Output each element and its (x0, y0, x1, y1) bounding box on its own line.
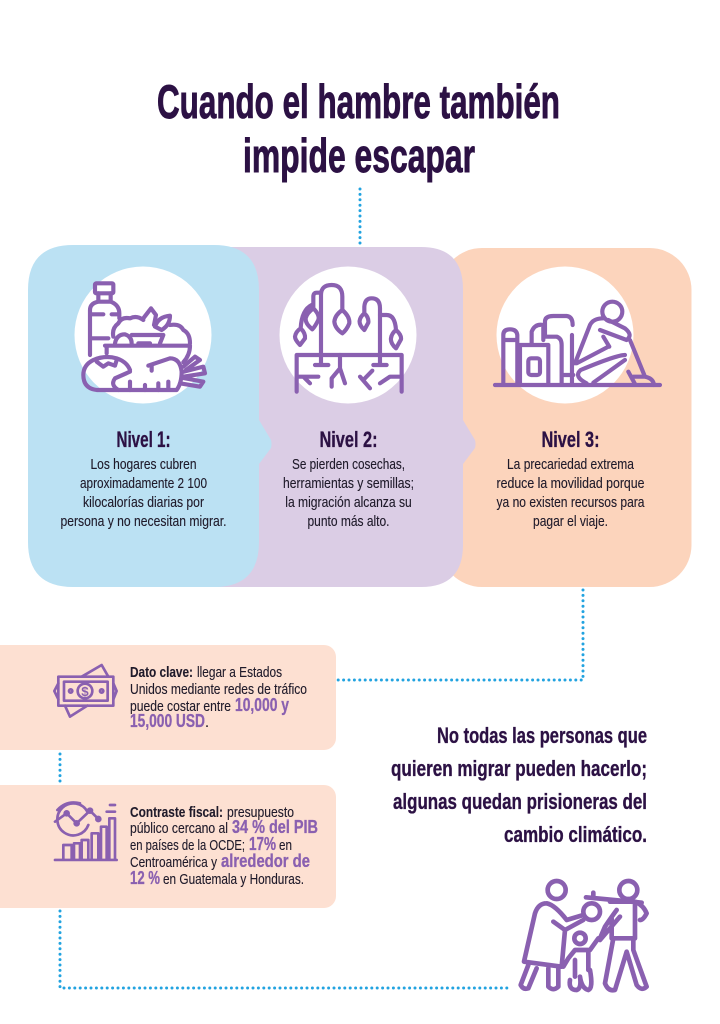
text: nivel 2: punto más alto. (308, 514, 390, 530)
text: contraste fiscal: 12 % (130, 868, 160, 888)
icon: banknotes (54, 665, 117, 717)
panel: contraste fiscal (0, 785, 336, 908)
text: contraste fiscal: Contraste fiscal: (130, 805, 223, 821)
text: dato clave: . (205, 715, 209, 731)
text: contraste fiscal: presupuesto (227, 805, 294, 821)
text: dato clave: Dato clave: (130, 665, 193, 681)
text: contraste fiscal: 34 % del PIB (232, 817, 318, 837)
text: nivel 2: la migración alcanza su (285, 495, 412, 511)
panel: nivel 2 (215, 247, 476, 587)
text: nivel 2 (283, 427, 414, 530)
text: nivel 3: reduce la movilidad porque (496, 476, 644, 492)
text: contraste fiscal: en países de la OCDE; (130, 838, 245, 854)
text: dato clave: Unidos mediante redes de tráfico (130, 682, 307, 698)
text: nivel 1: persona y no necesitan migrar. (60, 514, 226, 530)
callout: cambio climático. (504, 822, 647, 847)
text: nivel 3: pagar el viaje. (533, 514, 608, 530)
title: impide escapar (243, 129, 475, 182)
panel: dato clave (0, 645, 336, 750)
icon: food basket (83, 283, 205, 390)
panel: nivel 3 (440, 248, 692, 587)
text: nivel 2: herramientas y semillas; (283, 476, 414, 492)
icon: charts (55, 802, 117, 860)
text: nivel 1: kilocalorías diarias por (83, 495, 204, 511)
text: nivel 2: Se pierden cosechas, (292, 457, 405, 473)
text: contraste fiscal: público cercano al (130, 821, 228, 837)
callout: algunas quedan prisioneras del (393, 789, 647, 814)
text: contraste fiscal: 17% (249, 834, 276, 854)
text: dato clave: puede costar entre (130, 699, 231, 715)
icon: family (521, 881, 647, 990)
text: contraste fiscal: alrededor de (221, 851, 310, 871)
text: nivel 1: Los hogares cubren (90, 457, 196, 473)
text: contraste fiscal: Centroamérica y (130, 855, 218, 871)
text: contraste fiscal (130, 805, 318, 888)
icon: banknotes: $ (81, 684, 89, 699)
icon: person sitting with luggage (495, 302, 660, 385)
callout: No todas las personas que (437, 723, 647, 748)
text: contraste fiscal: en (279, 838, 292, 854)
title (157, 75, 560, 182)
text: nivel 3: La precariedad extrema (507, 457, 635, 473)
icon: withered plants and cracked soil (295, 285, 402, 392)
text: dato clave (130, 665, 307, 731)
text: nivel 1: Nivel 1: (116, 427, 170, 452)
text: nivel 2: Nivel 2: (320, 427, 378, 452)
text: contraste fiscal: en Guatemala y Honduras. (163, 872, 304, 888)
text: dato clave: 15,000 USD (130, 711, 205, 731)
text: nivel 1: aproximadamente 2 100 (80, 476, 207, 492)
callout: quieren migrar pueden hacerlo; (391, 756, 647, 781)
text: nivel 3 (496, 427, 645, 530)
panel: nivel 1 (28, 245, 272, 587)
text: nivel 3: Nivel 3: (542, 427, 600, 452)
text: nivel 3: ya no existen recursos para (496, 495, 645, 511)
text: dato clave: llegar a Estados (197, 665, 282, 681)
text: nivel 1 (60, 427, 226, 530)
text: dato clave: 10,000 y (235, 695, 289, 715)
callout (391, 723, 647, 847)
